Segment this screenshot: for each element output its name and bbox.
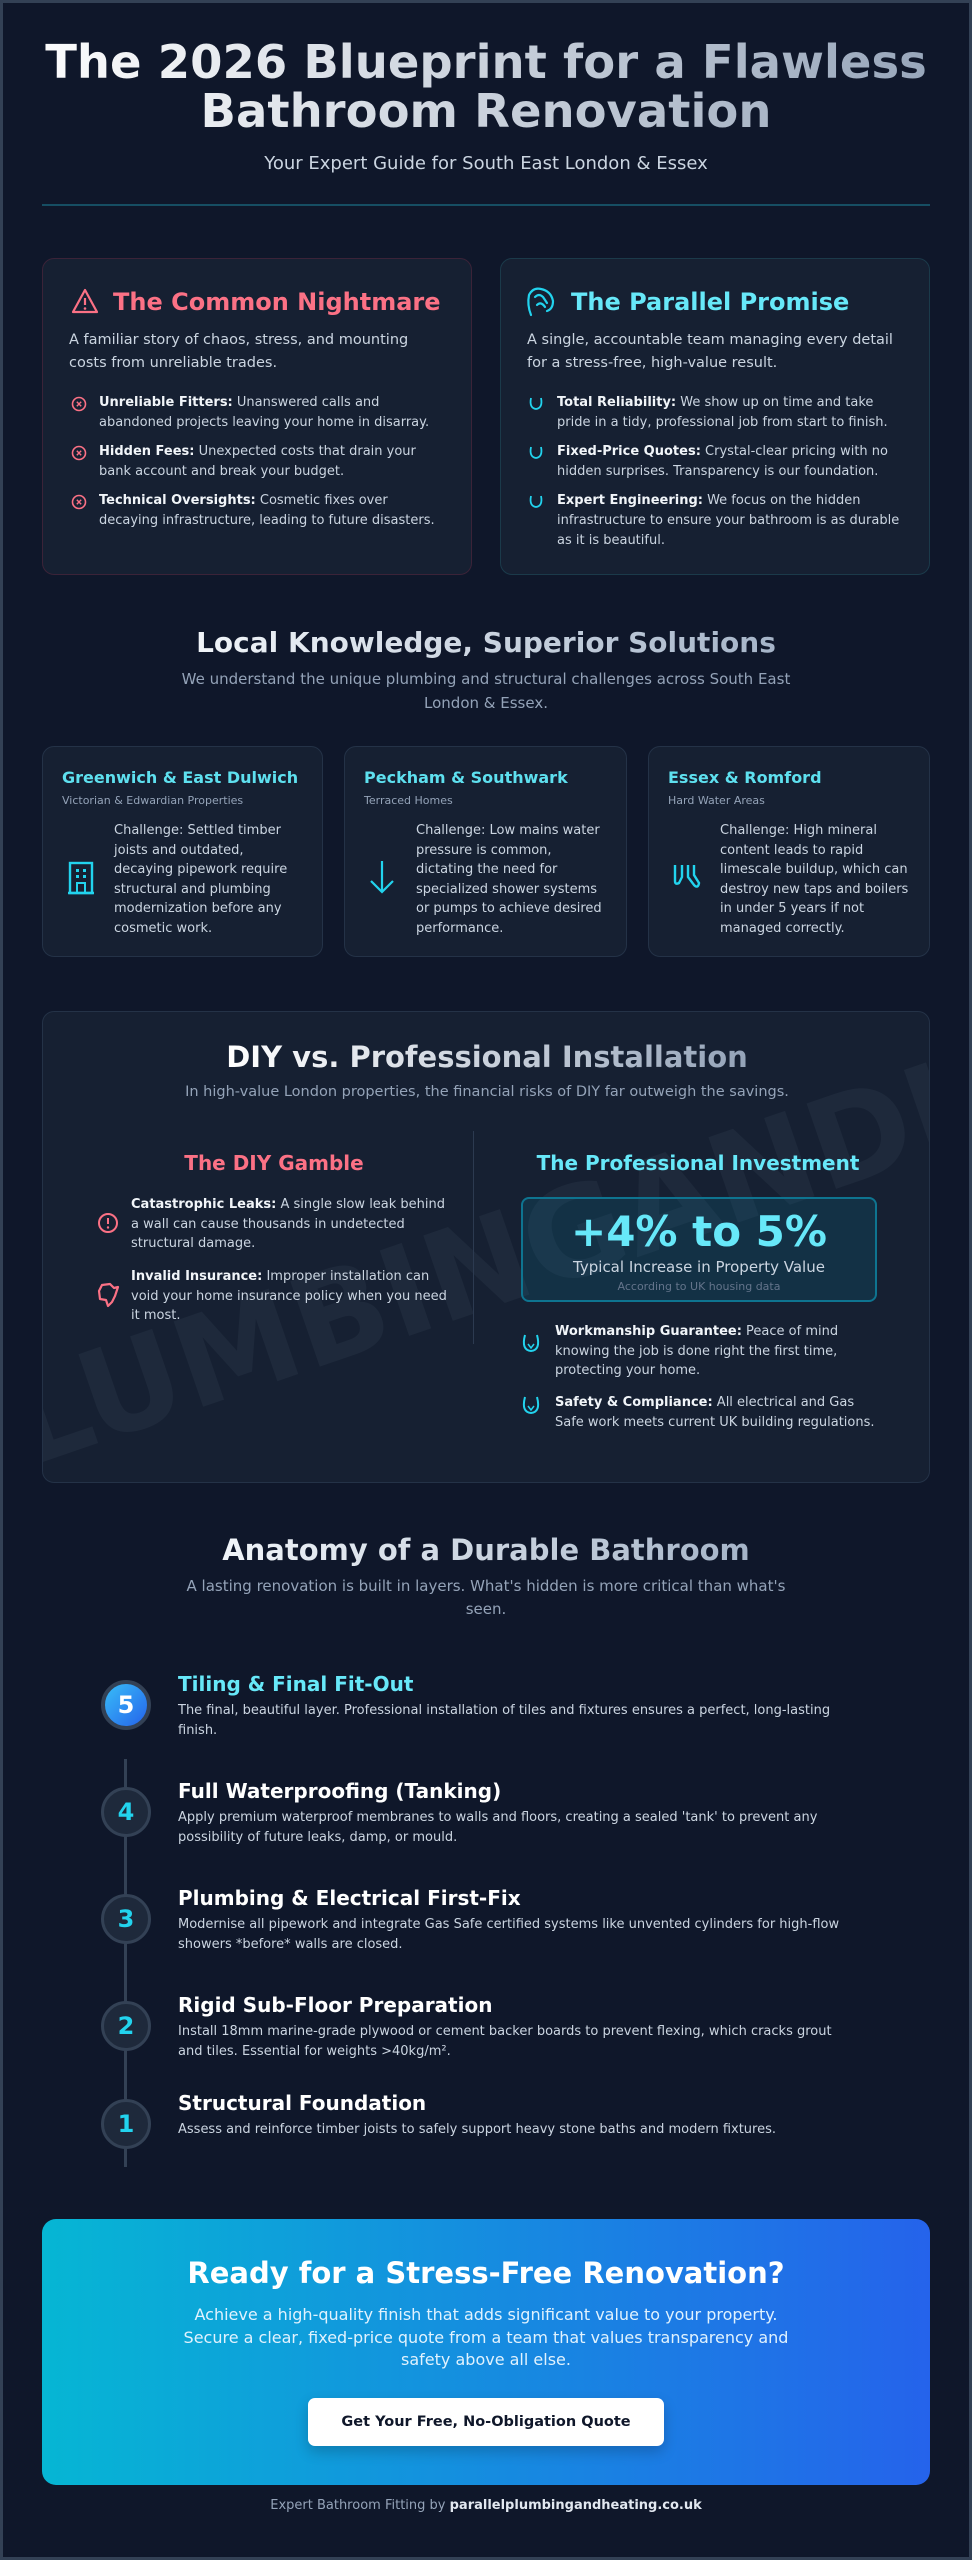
stat box	[521, 1197, 877, 1302]
stat box: +4% to 5%	[571, 1207, 827, 1256]
stat box: Typical Increase in Property Value	[573, 1258, 825, 1276]
column: DIY gamble	[98, 1151, 447, 1323]
icon: pipes	[674, 865, 700, 888]
step 2: Install 18mm marine-grade plywood or cement backer boards to prevent flexing, which cracks grout and tiles. Essential for weights >40kg/m².	[178, 2024, 832, 2058]
panel: peckham: Peckham & Southwark	[364, 768, 568, 787]
step 5: 5	[118, 1691, 134, 1719]
step 3	[101, 1886, 839, 1952]
list items: Technical Oversights: Cosmetic fixes over decaying infrastructure, leading to future disasters.	[99, 493, 435, 528]
icon: check	[522, 1396, 540, 1414]
title: The 2026 Blueprint for a Flawless	[45, 35, 927, 89]
panel: greenwich	[42, 746, 323, 957]
step 3: Plumbing & Electrical First-Fix	[178, 1886, 521, 1910]
icon: check	[522, 1334, 540, 1352]
column: professional investment: Workmanship Guarantee: Peace of mind knowing the job is done right the first time, protecting your home.	[555, 1324, 838, 1378]
step 5: Tiling & Final Fit-Out	[178, 1672, 413, 1696]
column: professional investment	[521, 1151, 877, 1430]
step 3: 3	[118, 1905, 134, 1933]
icon: down arrow	[370, 861, 394, 894]
list items	[72, 395, 435, 528]
description: A familiar story of chaos, stress, and mounting costs from unreliable trades.	[69, 332, 408, 371]
heading: anatomy: Anatomy of a Durable Bathroom	[222, 1533, 750, 1567]
icon: alert	[98, 1213, 118, 1233]
step 4: Full Waterproofing (Tanking)	[178, 1779, 501, 1803]
panel: parallel promise	[500, 258, 930, 575]
description: A single, accountable team managing every detail for a stress-free, high-value result.	[527, 332, 893, 371]
panel: peckham: Terraced Homes	[364, 794, 453, 807]
title: Bathroom Renovation	[201, 84, 771, 138]
column: professional investment: The Professional Investment	[537, 1151, 859, 1175]
panel: greenwich: Victorian & Edwardian Properties	[62, 794, 243, 807]
panel: CTA	[42, 2219, 930, 2485]
footer: Expert Bathroom Fitting by parallelplumbingandheating.co.uk	[270, 2498, 702, 2513]
panel: common nightmare	[42, 258, 472, 575]
button: Get Your Free, No-Obligation Quote	[341, 2414, 631, 2430]
list items	[530, 395, 899, 548]
icon: handshake	[527, 288, 554, 316]
button	[308, 2398, 664, 2446]
subtitle: Your Expert Guide for South East London & Essex	[264, 153, 708, 174]
list items: Total Reliability: We show up on time and take pride in a tidy, professional job from start to finish.	[557, 395, 888, 430]
panel: essex: Essex & Romford	[668, 768, 822, 787]
step 1: 1	[118, 2110, 134, 2138]
step 2: 2	[118, 2012, 134, 2040]
column: DIY gamble: The DIY Gamble	[184, 1151, 364, 1175]
panel: essex	[648, 746, 930, 957]
step 4: Apply premium waterproof membranes to walls and floors, creating a sealed 'tank' to prevent any possibility of future leaks, damp, or mould.	[178, 1810, 817, 1844]
step 4	[101, 1779, 817, 1844]
panel: peckham	[344, 746, 627, 957]
list items: Hidden Fees: Unexpected costs that drain your bank account and break your budget.	[99, 444, 416, 479]
panel: CTA: Achieve a high-quality finish that adds significant value to your property. Secure a clear, fixed-price quote from a team that values transparency and safety above all else.	[184, 2305, 788, 2369]
icon: building	[68, 862, 94, 894]
icon: warning	[72, 288, 98, 314]
subtitle: In high-value London properties, the financial risks of DIY far outweigh the savings.	[185, 1084, 789, 1100]
icon: broken shield	[98, 1282, 120, 1308]
column: DIY gamble: Catastrophic Leaks: A single slow leak behind a wall can cause thousands in undetected structural damage.	[131, 1197, 445, 1251]
step 4: 4	[118, 1798, 134, 1826]
text: local subtitle: We understand the unique plumbing and structural challenges across South East London & Essex.	[182, 670, 790, 712]
column: professional investment: Safety & Compliance: All electrical and Gas Safe work meets current UK building regulations.	[555, 1395, 875, 1430]
step 1: Assess and reinforce timber joists to safely support heavy stone baths and modern fixtures.	[178, 2122, 776, 2137]
step 1	[101, 2091, 776, 2149]
list items: Unreliable Fitters: Unanswered calls and abandoned projects leaving your home in disarray.	[99, 395, 429, 430]
list items: Expert Engineering: We focus on the hidden infrastructure to ensure your bathroom is as durable as it is beautiful.	[557, 493, 899, 548]
panel: CTA: Ready for a Stress-Free Renovation?	[187, 2256, 785, 2290]
step 3: Modernise all pipework and integrate Gas Safe certified systems like unvented cylinders for high-flow showers *before* walls are closed.	[178, 1917, 839, 1952]
text: anatomy subtitle: A lasting renovation is built in layers. What's hidden is more critical than what's seen.	[187, 1577, 785, 1618]
step 5	[101, 1672, 830, 1738]
step 1: Structural Foundation	[178, 2091, 426, 2115]
step 2	[101, 1993, 832, 2058]
title	[10, 38, 962, 136]
step 2: Rigid Sub-Floor Preparation	[178, 1993, 492, 2017]
heading: The Common Nightmare	[113, 288, 441, 316]
panel: essex: Hard Water Areas	[668, 794, 765, 807]
heading: The Parallel Promise	[571, 288, 849, 316]
timeline	[101, 1672, 839, 2167]
heading: local knowledge: Local Knowledge, Superior Solutions	[196, 626, 776, 659]
panel: DIY vs professional	[42, 1011, 930, 1483]
heading: DIY vs. Professional Installation	[226, 1040, 748, 1074]
panel: greenwich: Greenwich & East Dulwich	[62, 768, 298, 787]
list items: Fixed-Price Quotes: Crystal-clear pricing with no hidden surprises. Transparency is our foundation.	[557, 444, 888, 479]
panel: essex: Challenge: High mineral content leads to rapid limescale buildup, which can destroy new taps and boilers in under 5 years if not managed correctly.	[720, 823, 908, 936]
column: DIY gamble: Invalid Insurance: Improper installation can void your home insurance policy when you need it most.	[131, 1269, 447, 1323]
step 5: The final, beautiful layer. Professional installation of tiles and fixtures ensures a perfect, long-lasting finish.	[178, 1703, 830, 1738]
panel: greenwich: Challenge: Settled timber joists and outdated, decaying pipework require structural and plumbing modernization before any cosmetic work.	[114, 823, 287, 936]
panel: peckham: Challenge: Low mains water pressure is common, dictating the need for specialized shower systems or pumps to achieve desired performance.	[416, 823, 602, 936]
stat box: According to UK housing data	[618, 1280, 780, 1293]
